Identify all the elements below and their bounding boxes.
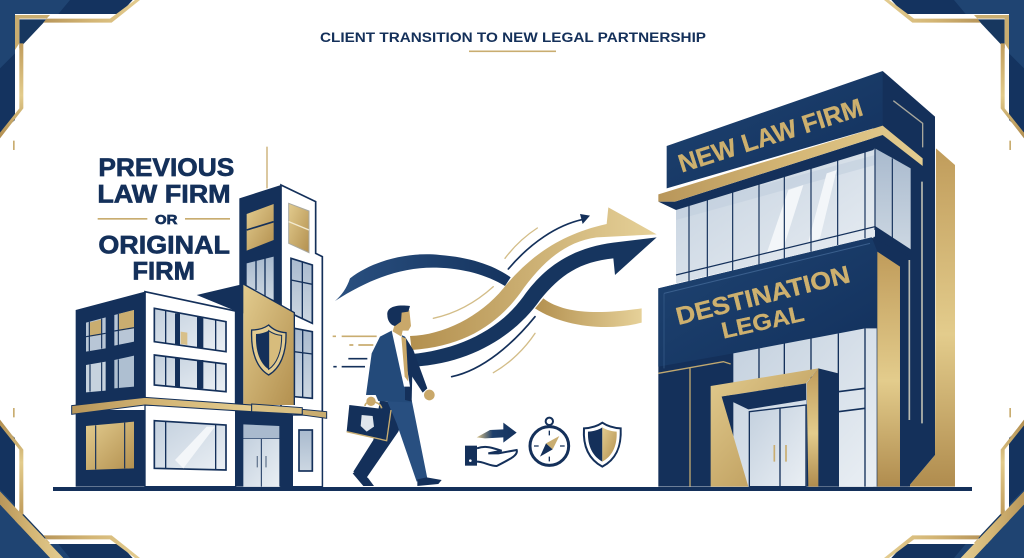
lower navy facade bbox=[658, 182, 922, 487]
new law firm sign: NEW LAW FIRM bbox=[675, 94, 866, 178]
previous firm label bbox=[97, 154, 234, 285]
icon: compass bbox=[530, 418, 569, 465]
gold ledge bbox=[72, 397, 327, 418]
arm and hand bbox=[405, 337, 427, 393]
new law firm sign bbox=[658, 71, 923, 210]
transition arrows and walking client bbox=[333, 207, 657, 486]
tower bbox=[239, 185, 322, 487]
destination legal sign text: LEGAL bbox=[719, 300, 807, 344]
title: CLIENT TRANSITION TO NEW LEGAL PARTNERSHIP bbox=[320, 30, 706, 45]
main navy arrow bbox=[412, 237, 657, 367]
previous firm label: PREVIOUS bbox=[98, 154, 234, 182]
shoes bbox=[353, 469, 374, 486]
corner ornament: top right bbox=[884, 0, 1024, 150]
face bbox=[393, 310, 411, 337]
icon: shield bbox=[584, 423, 621, 467]
ground floor bbox=[76, 405, 322, 487]
previous firm label: LAW FIRM bbox=[97, 181, 231, 209]
corner ornament: top left bbox=[0, 0, 140, 150]
back leg bbox=[353, 400, 408, 480]
right building: new law firm bbox=[658, 71, 955, 487]
jacket bbox=[366, 331, 412, 402]
speed lines bbox=[333, 336, 377, 367]
hair bbox=[387, 306, 410, 326]
corner ornament: bottom right bbox=[884, 408, 1024, 558]
shirt and tie bbox=[392, 331, 410, 387]
previous firm label: ORIGINAL bbox=[98, 231, 230, 259]
destination legal sign text: DESTINATION bbox=[673, 261, 853, 331]
title underline bbox=[469, 50, 556, 52]
briefcase bbox=[347, 397, 391, 441]
navy side wall bbox=[873, 71, 935, 487]
gold arc trailing bbox=[535, 298, 642, 327]
front leg bbox=[387, 400, 427, 482]
left building: previous firm bbox=[72, 147, 327, 487]
thin accent arrows bbox=[433, 214, 590, 377]
main gold arrow bbox=[410, 207, 657, 350]
corner ornament: bottom left bbox=[0, 408, 140, 558]
glass upper storey bbox=[676, 148, 911, 283]
white upper block bbox=[76, 284, 243, 410]
previous firm label: FIRM bbox=[132, 257, 195, 285]
gold slab with shield bbox=[243, 284, 294, 405]
icon: handover arrow bbox=[465, 423, 517, 466]
previous firm label: OR bbox=[155, 213, 177, 227]
gold rear wall bbox=[908, 148, 955, 487]
walking client figure bbox=[347, 306, 442, 486]
entrance portal bbox=[711, 368, 838, 487]
glass lower storey bbox=[733, 328, 877, 487]
antenna bbox=[266, 147, 268, 188]
navy arc outgoing bbox=[335, 254, 511, 301]
ground line bbox=[53, 487, 972, 491]
